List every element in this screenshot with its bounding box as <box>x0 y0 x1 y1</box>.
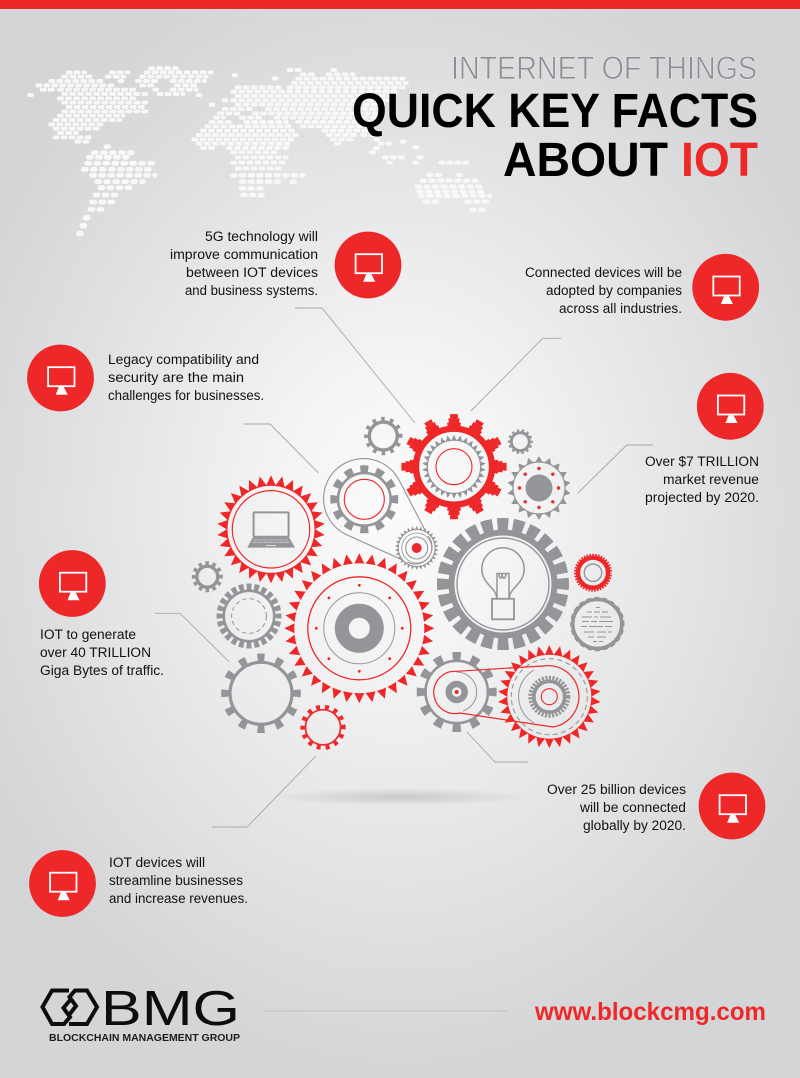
title: INTERNET OF THINGS <box>451 50 757 86</box>
gear cluster <box>194 416 623 753</box>
gear: grey with red dots <box>502 451 576 525</box>
top red bar <box>0 0 800 9</box>
callout: connected devices: Connected devices will be <box>525 265 682 281</box>
callout: 25 billion devices: Over 25 billion devices <box>547 782 686 798</box>
drive belt <box>324 459 432 564</box>
callout: 5G technology <box>170 229 401 299</box>
callout: streamline businesses: streamline businesses <box>109 873 243 889</box>
gear: red serrated small <box>575 555 611 591</box>
callout: market revenue: projected by 2020. <box>645 490 759 506</box>
icon: light bulb <box>482 548 524 619</box>
gear: red lower right <box>434 640 606 753</box>
world dot map <box>29 68 492 234</box>
callout: 40 trillion GB traffic: over 40 TRILLION <box>40 645 151 661</box>
callout: 25 billion devices <box>547 773 765 839</box>
callout: legacy compatibility: Legacy compatibility and <box>108 352 259 368</box>
logo: BMG: BMG <box>101 982 240 1036</box>
gear: tiny grey top right <box>509 431 531 453</box>
title: ABOUT <box>503 134 668 187</box>
callout: 5G technology: improve communication <box>170 247 318 263</box>
gear: red with laptop <box>212 470 330 588</box>
callout: 25 billion devices: globally by 2020. <box>583 818 686 834</box>
gear: small grey top <box>366 419 400 453</box>
icon: laptop <box>247 512 295 548</box>
callout: 5G technology: between IOT devices <box>186 265 318 281</box>
callout: 5G technology: and business systems. <box>185 283 318 299</box>
title: QUICK KEY FACTS <box>352 85 758 138</box>
gear: small red bottom <box>303 707 343 748</box>
gear: grey dashed <box>220 588 278 644</box>
callout: streamline businesses <box>29 850 248 917</box>
callout: legacy compatibility: security are the main <box>108 370 244 386</box>
gear: plain grey large <box>226 658 296 728</box>
callout: market revenue: Over $7 TRILLION <box>645 454 759 470</box>
gear: grey with text lines <box>571 598 623 650</box>
website url: www.blockcmg.com <box>534 998 766 1026</box>
gear: small with red dot <box>393 524 441 572</box>
gear: small grey left <box>194 563 221 590</box>
red belt <box>434 666 579 727</box>
callout: connected devices: across all industries. <box>559 301 682 317</box>
callout: 40 trillion GB traffic: Giga Bytes of traffic. <box>40 663 164 679</box>
title: IOT <box>681 134 758 187</box>
footer divider <box>264 1010 508 1012</box>
callout: legacy compatibility: challenges for businesses. <box>108 388 264 404</box>
logo chain mark <box>42 990 97 1024</box>
ground shadow <box>270 788 530 806</box>
callout: connected devices: adopted by companies <box>546 283 682 299</box>
callout: 40 trillion GB traffic <box>39 550 164 679</box>
callout: connected devices <box>525 254 759 321</box>
logo: BMG: BLOCKCHAIN MANAGEMENT GROUP <box>49 1033 240 1044</box>
gear: grey lower with donut <box>422 657 492 727</box>
gear: light bulb <box>446 526 560 642</box>
gear: grey with belt <box>324 459 432 564</box>
gear: big red centre <box>284 553 434 703</box>
callout: legacy compatibility <box>27 345 264 411</box>
callout: 40 trillion GB traffic: IOT to generate <box>40 627 136 643</box>
callout: 5G technology: 5G technology will <box>205 229 318 245</box>
title <box>352 50 758 187</box>
callout: market revenue: market revenue <box>663 472 759 488</box>
callout: 25 billion devices: will be connected <box>579 800 686 816</box>
callout: streamline businesses: and increase revenues. <box>109 891 248 907</box>
logo: BMG <box>42 982 240 1044</box>
callout: streamline businesses: IOT devices will <box>109 855 205 871</box>
connector lines <box>155 308 653 827</box>
gear: red top <box>403 416 505 517</box>
callout: market revenue <box>645 373 764 506</box>
